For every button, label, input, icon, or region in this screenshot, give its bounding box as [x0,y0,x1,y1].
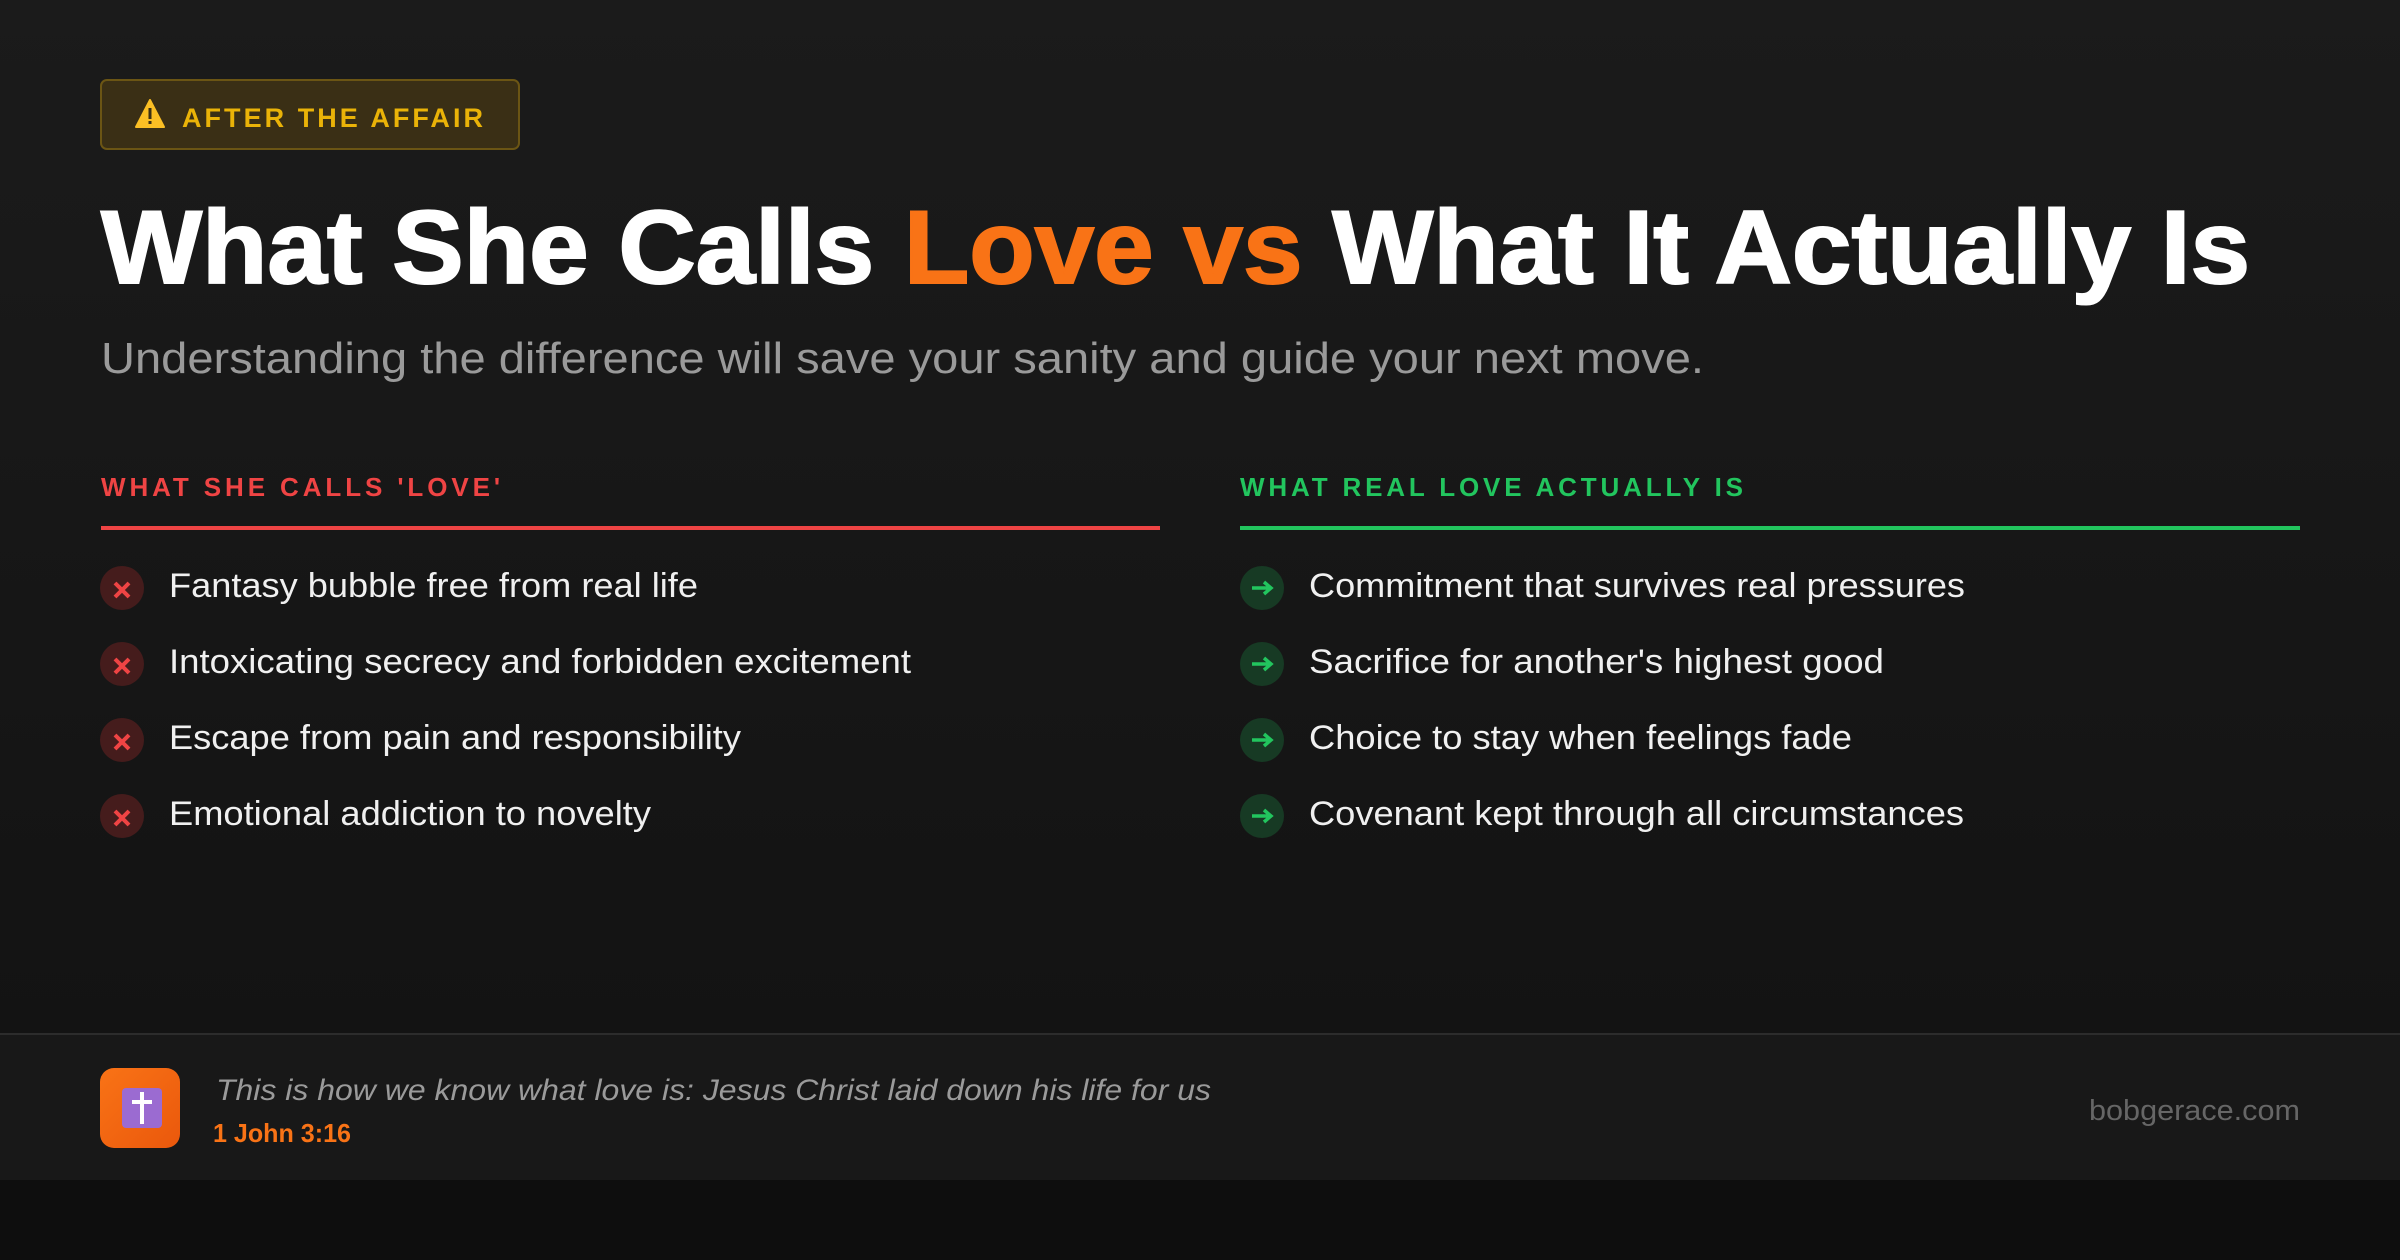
footer [100,1068,2300,1148]
panel: what real love is [1240,472,2300,838]
item: emotional addiction: Emotional addiction to novelty [169,795,651,833]
item: sacrifice: Sacrifice for another's highest good [1309,643,1884,681]
panel: what she calls love [100,472,1160,838]
heading: right column: WHAT REAL LOVE ACTUALLY IS [1240,472,1743,502]
icon: cross [100,1068,180,1148]
item: fantasy bubble: Fantasy bubble free from real life [169,567,698,605]
site url: bobgerace.com [2089,1095,2300,1127]
item: covenant: Covenant kept through all circumstances [1309,795,1964,833]
quote text: This is how we know what love is: Jesus Christ laid down his life for us [216,1074,1211,1107]
icon: warning [136,100,164,127]
item: commitment: Commitment that survives real pressures [1309,567,1965,605]
quote reference: 1 John 3:16 [213,1118,351,1148]
heading: left column: WHAT SHE CALLS 'LOVE' [101,472,500,502]
subtitle: Understanding the difference will save your sanity and guide your next move. [101,334,1704,383]
item: escape: Escape from pain and responsibility [169,719,741,757]
item: choice: Choice to stay when feelings fade [1309,719,1852,757]
item: intoxicating secrecy: Intoxicating secrecy and forbidden excitement [169,643,912,681]
title: What She Calls Love vs What It Actually Is [101,190,2250,306]
badge: after the affair: AFTER THE AFFAIR [182,103,483,133]
badge: after the affair [101,80,519,149]
